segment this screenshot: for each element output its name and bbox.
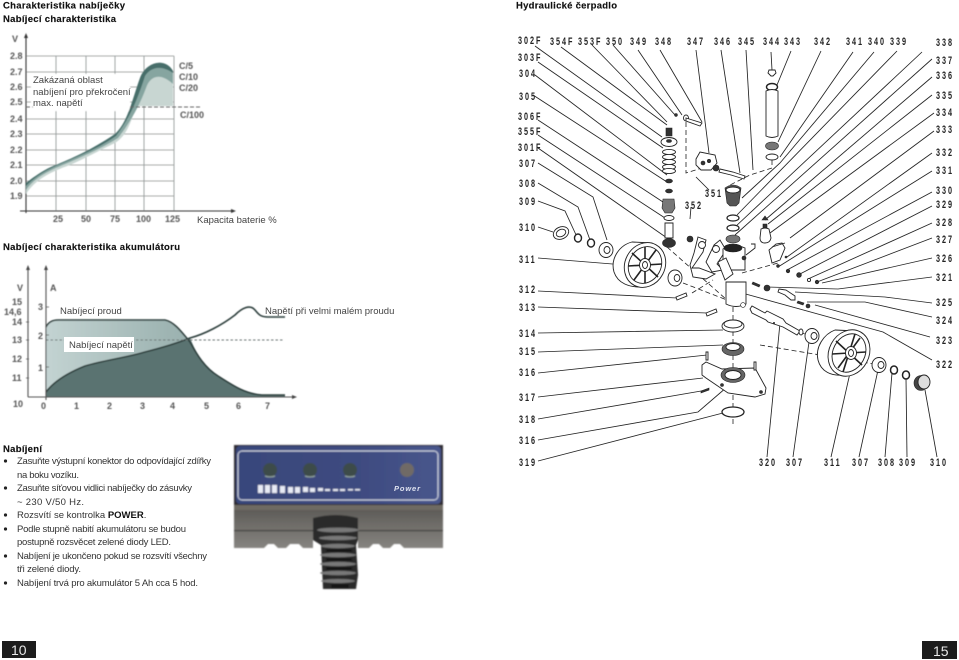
part numbers: 349 [630, 36, 648, 47]
centre valve and rings [725, 185, 741, 243]
part numbers: 307 [852, 457, 870, 468]
bearings and base plate [701, 320, 766, 417]
chart axis labels: 15 [12, 297, 22, 307]
chart axis labels: 2.7 [10, 67, 23, 77]
part numbers: 310 [930, 457, 948, 468]
chart axis labels: 4 [170, 401, 175, 411]
section: charging instructions: Nabíjení trvá pro akumulátor 5 Ah cca 5 hod. [17, 578, 198, 589]
left stack [661, 128, 677, 248]
photo: charger control panel [234, 445, 443, 589]
chart axis labels: V [12, 34, 18, 44]
chart: charging current and voltage over time [4, 265, 394, 411]
chart axis labels: 125 [165, 214, 180, 224]
section: charging instructions [3, 444, 211, 589]
part numbers: 307 [519, 158, 537, 169]
chart axis labels: 50 [81, 214, 91, 224]
part numbers: 313 [519, 302, 537, 313]
part numbers: 331 [936, 165, 954, 176]
part numbers: 311 [824, 457, 842, 468]
chart axis labels: 3 [38, 302, 43, 312]
part numbers [518, 35, 954, 468]
part numbers: 310 [519, 222, 537, 233]
section: charging instructions: postupně rozsvěcet zelené diody LED. [17, 537, 171, 548]
part numbers: 339 [890, 36, 908, 47]
chart axis labels: 2.8 [10, 51, 23, 61]
section: charging instructions: Podle stupně nabití akumulátoru se budou [17, 524, 186, 535]
chart axis labels: 14,6 [4, 307, 22, 317]
chart axis labels: 2 [107, 401, 112, 411]
chart axis labels [4, 283, 270, 411]
section: charging instructions: Zasuňte výstupní konektor do odpovídající zdířky [17, 456, 211, 467]
part numbers: 309 [899, 457, 917, 468]
pump parts [551, 70, 930, 417]
chart axis labels: 10 [13, 399, 23, 409]
part numbers: 345 [738, 36, 756, 47]
part numbers: 329 [936, 199, 954, 210]
part numbers: 352 [685, 200, 703, 211]
section: charging instructions: Zasuňte síťovou vidlici nabíječky do zásuvky [17, 483, 192, 494]
part numbers: 333 [936, 124, 954, 135]
page number left [2, 641, 36, 658]
part numbers: 309 [519, 196, 537, 207]
chart axis labels: C/10 [179, 72, 198, 82]
bracket, nut and pump body [687, 236, 755, 307]
part numbers: 324 [936, 315, 954, 326]
chart axis labels: 3 [140, 401, 145, 411]
section: charging instructions: Rozsvítí se kontrolka POWER. [17, 510, 146, 521]
section: charging instructions: ~ 230 V/50 Hz. [17, 497, 84, 508]
label: power: Power [394, 484, 421, 493]
heading: battery charging characteristic: Nabíjecí charakteristika akumulátoru [3, 242, 180, 253]
chart axis labels: C/5 [179, 61, 193, 71]
part numbers: 354F [550, 36, 574, 47]
section: charging instructions: na boku vozíku. [17, 470, 79, 481]
chart axis labels: 1.9 [10, 191, 23, 201]
chart axis labels: 13 [12, 335, 22, 345]
wheel right and hub parts [805, 322, 930, 390]
chart axis labels: 100 [136, 214, 151, 224]
part numbers: 325 [936, 297, 954, 308]
heading: hydraulic pump: Hydraulické čerpadlo [516, 0, 617, 12]
part numbers: 315 [519, 346, 537, 357]
label: charging current: Nabíjecí proud [60, 306, 122, 317]
chart axis labels: 0 [41, 401, 46, 411]
right cup and bracket [760, 216, 787, 263]
part numbers: 327 [936, 234, 954, 245]
section: charging instructions: tři zelené diody. [17, 564, 81, 575]
chart axis labels: 11 [12, 373, 22, 383]
chart axis labels: 2.2 [10, 145, 23, 155]
chart: voltage vs battery capacity [10, 33, 277, 226]
callout: forbidden zone: Zakázaná oblast [33, 75, 103, 86]
section: charging instructions: Nabíjení [3, 444, 42, 455]
chart axis labels: 75 [110, 214, 120, 224]
left cap, rings, roller [551, 224, 613, 258]
part numbers: 347 [687, 36, 705, 47]
part numbers: 330 [936, 185, 954, 196]
part numbers: 323 [936, 335, 954, 346]
chart axis labels: 5 [204, 401, 209, 411]
chart axis labels: 6 [236, 401, 241, 411]
chart axis labels: C/20 [179, 83, 198, 93]
part numbers: 346 [714, 36, 732, 47]
heading: charger characteristic: Charakteristika nabíječky [3, 0, 126, 12]
part numbers: 353F [578, 36, 602, 47]
part numbers: 306F [518, 111, 542, 122]
chart axis labels: C/100 [180, 110, 204, 120]
x-axis title: Kapacita baterie % [197, 215, 277, 226]
piston assembly right [766, 70, 778, 160]
label: charging voltage: Nabíjecí napětí [69, 340, 133, 351]
part numbers: 348 [655, 36, 673, 47]
part numbers: 334 [936, 107, 954, 118]
part numbers: 314 [519, 328, 537, 339]
chart axis labels: 2.3 [10, 129, 23, 139]
part numbers: 351 [705, 188, 723, 199]
section: charging instructions: Nabíjení je ukončeno pokud se rozsvítí všechny [17, 551, 207, 562]
callout: forbidden zone: max. napětí [33, 98, 83, 109]
chart axis labels: A [50, 283, 57, 293]
chart axis labels: 2 [38, 331, 43, 341]
part numbers: 341 [846, 36, 864, 47]
chart axis labels: V [17, 283, 23, 293]
callout: forbidden zone: nabíjení pro překročení [33, 87, 131, 98]
callout: forbidden zone [33, 75, 131, 109]
part numbers: 336 [936, 70, 954, 81]
part numbers: 321 [936, 272, 954, 283]
part numbers: 355F [518, 126, 542, 137]
part numbers: 338 [936, 37, 954, 48]
chart axis labels: 1 [74, 401, 79, 411]
exploded diagram: hydraulic pump [518, 35, 954, 468]
chart axis labels: 14 [12, 317, 22, 327]
part numbers: 350 [606, 36, 624, 47]
part numbers: 316 [519, 435, 537, 446]
label: voltage at very low current: Napětí při velmi malém proudu [265, 306, 394, 317]
chart axis labels: 7 [265, 401, 270, 411]
axle [750, 306, 803, 335]
chart axis labels: 2.4 [10, 114, 23, 124]
small fasteners [752, 265, 819, 308]
part numbers: 301F [518, 142, 542, 153]
part numbers: 322 [936, 359, 954, 370]
part numbers: 308 [519, 178, 537, 189]
dashed assembly lines [667, 122, 880, 426]
part numbers: 326 [936, 253, 954, 264]
chart axis labels: 2.0 [10, 176, 23, 186]
part numbers: 335 [936, 90, 954, 101]
part numbers: 344 [763, 36, 781, 47]
label: charging voltage [64, 337, 134, 352]
part numbers: 343 [784, 36, 802, 47]
roller and pins [668, 270, 717, 316]
part numbers: 311 [519, 254, 537, 265]
part numbers: 328 [936, 217, 954, 228]
strain relief [313, 515, 359, 589]
part numbers: 320 [759, 457, 777, 468]
chart axis labels: 12 [12, 354, 22, 364]
leader lines [533, 45, 937, 461]
part numbers: 316 [519, 367, 537, 378]
part numbers: 308 [878, 457, 896, 468]
chart axis labels: 2.6 [10, 82, 23, 92]
part numbers: 340 [868, 36, 886, 47]
chart axis labels: 1 [38, 363, 43, 373]
part numbers: 332 [936, 147, 954, 158]
wheel left [613, 235, 673, 295]
part numbers: 304 [519, 68, 537, 79]
part numbers: 303F [518, 52, 542, 63]
chart axis labels: 2.5 [10, 97, 23, 107]
page number right [922, 641, 957, 659]
upper block and pins [675, 114, 745, 179]
part numbers: 317 [519, 392, 537, 403]
chart axis labels: 25 [53, 214, 63, 224]
part numbers: 305 [519, 91, 537, 102]
chart axis labels [10, 34, 204, 224]
part numbers: 318 [519, 414, 537, 425]
part numbers: 312 [519, 284, 537, 295]
chart axis labels: 2.1 [10, 160, 23, 170]
part numbers: 307 [786, 457, 804, 468]
part numbers: 319 [519, 457, 537, 468]
part numbers: 302F [518, 35, 542, 46]
page number left: 10 [11, 642, 27, 658]
heading: charging characteristic: Nabíjecí charakteristika [3, 14, 117, 25]
page number right: 15 [933, 643, 949, 659]
part numbers: 342 [814, 36, 832, 47]
part numbers: 337 [936, 55, 954, 66]
